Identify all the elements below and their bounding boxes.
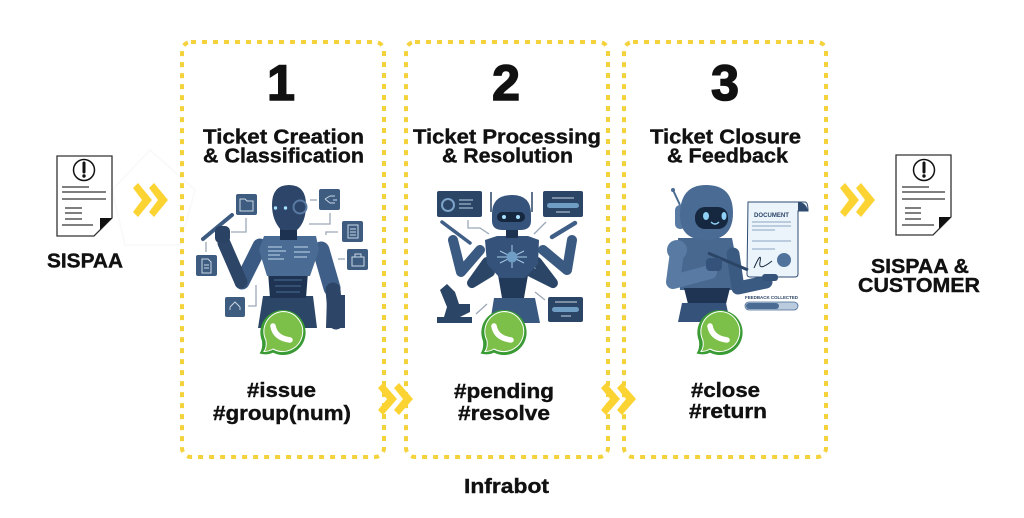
machine xyxy=(437,284,472,323)
panel: step 3 xyxy=(624,42,826,457)
icon: WhatsApp xyxy=(260,310,306,355)
robot limbs xyxy=(224,243,336,322)
hashtags: step 1: #group(num) xyxy=(213,402,351,425)
heading: step 2 xyxy=(413,126,601,168)
step number 1: 1 xyxy=(267,55,295,111)
heading: step 2: Ticket Processing xyxy=(413,126,601,148)
icon: WhatsApp xyxy=(696,310,743,355)
hashtags: step 3 xyxy=(689,379,767,423)
heading: step 1: & Classification xyxy=(203,144,364,168)
illustration: robot with signed document: DOCUMENT xyxy=(754,213,789,219)
robot arms xyxy=(442,222,575,283)
heading: step 1: Ticket Creation xyxy=(203,126,364,148)
icon: WhatsApp xyxy=(480,310,527,355)
illustration: multi-armed robot xyxy=(437,191,583,323)
heading: step 3: & Feedback xyxy=(667,144,789,168)
hashtags: step 2: #pending xyxy=(454,380,554,403)
label: SISPAA and customer: SISPAA & xyxy=(871,255,969,278)
arrow: out of step 3 xyxy=(840,183,875,217)
panel: step 2 xyxy=(406,42,608,457)
hashtags: step 2: #resolve xyxy=(458,402,550,425)
label: Infrabot: Infrabot xyxy=(464,475,549,498)
hashtags: step 3: #close xyxy=(691,379,760,402)
step number 2: 2 xyxy=(492,55,520,111)
icon: source document xyxy=(57,156,112,236)
label: SISPAA and customer xyxy=(858,255,980,297)
feedback bar: FEEDBACK COLLECTED xyxy=(745,295,798,301)
panel: step 1 xyxy=(182,42,384,457)
heading: step 3: Ticket Closure xyxy=(650,126,801,148)
hashtags: step 1: #issue xyxy=(247,379,316,402)
heading: step 2: & Resolution xyxy=(442,144,573,168)
hashtags: step 1 xyxy=(213,379,351,425)
arrow: step 1 to step 2 xyxy=(378,383,413,415)
illustration: robot with ticket icons xyxy=(196,185,368,328)
label: SISPAA and customer: CUSTOMER xyxy=(858,274,980,297)
heading: step 1 xyxy=(203,126,364,168)
robot pen xyxy=(203,215,232,239)
robot body xyxy=(678,238,742,290)
label: SISPAA: SISPAA xyxy=(47,250,123,272)
step number 3: 3 xyxy=(711,55,739,111)
arrow: step 2 to step 3 xyxy=(601,383,636,415)
heading: step 3 xyxy=(650,126,801,168)
document xyxy=(747,202,808,277)
hashtags: step 3: #return xyxy=(689,400,767,423)
arrow: into step 1 xyxy=(133,183,168,217)
icon: destination document xyxy=(896,155,951,235)
hashtags: step 2 xyxy=(454,380,554,425)
illustration: robot with signed document xyxy=(667,185,808,322)
